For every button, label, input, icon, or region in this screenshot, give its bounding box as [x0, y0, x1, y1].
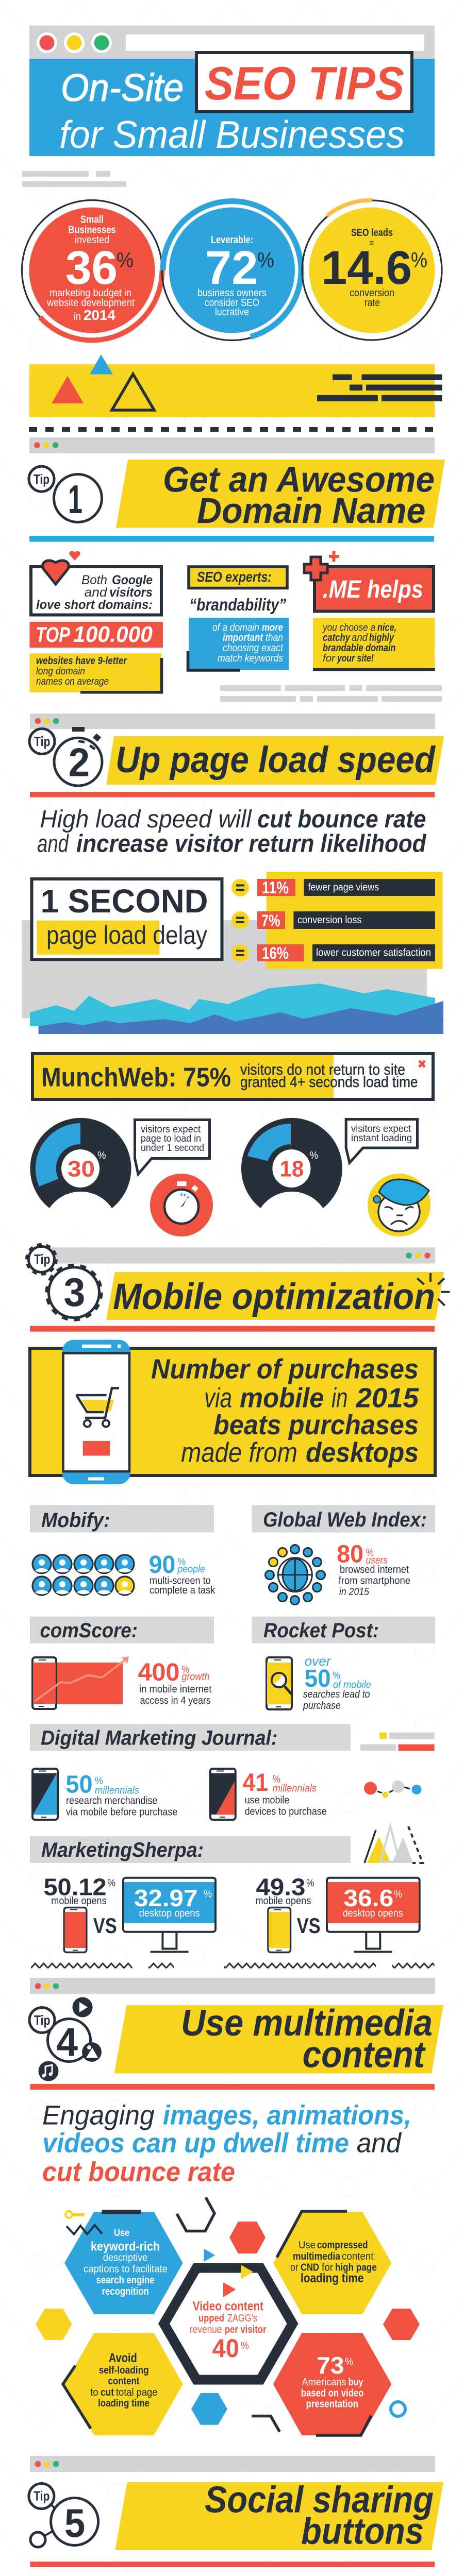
- panel: global web index: [252, 1505, 435, 1604]
- stat: 7% conversion loss: 7%: [261, 911, 280, 930]
- panel: love short domains: Both: [81, 573, 107, 587]
- stat circle: 14.6%: SEO leads: [351, 227, 393, 239]
- stat: 49.3% vs 36.6%: %: [394, 1889, 402, 1900]
- panel: mobile purchases 2015: in: [332, 1383, 347, 1414]
- hexagon: compressed multimedia: compressed: [317, 2240, 368, 2251]
- panel: global web index: from smartphone: [339, 1575, 410, 1586]
- panel: global web index: %: [366, 1547, 374, 1558]
- hexagon: video content 40%: revenue: [190, 2324, 222, 2335]
- panel: .ME helps: highly: [369, 632, 394, 643]
- panel: mobify: [30, 1505, 216, 1596]
- panel: seo experts brandability: than: [266, 632, 283, 643]
- panel: mobile purchases 2015: [30, 1340, 435, 1484]
- hexagon: video content 40%: Video content: [193, 2299, 264, 2313]
- icon: tip 1 badge: 1: [68, 477, 82, 522]
- tip 2 header: [29, 714, 444, 798]
- panel: one second delay: page load delay: [46, 921, 207, 950]
- panel: mobify: complete a task: [150, 1585, 216, 1596]
- hexagon: keyword-rich captions: recognition: [102, 2286, 149, 2297]
- stat circle: 36%: Small: [80, 214, 104, 226]
- icon: tip 2 stopwatch badge: Tip: [34, 734, 51, 749]
- stat circle: 72%: business owners: [197, 287, 267, 299]
- area chart: [30, 984, 443, 1034]
- panel: mobify: Mobify:: [41, 1509, 110, 1532]
- panel: digital marketing journal: 41: [243, 1769, 268, 1797]
- panel: .ME helps: nice,: [377, 622, 396, 634]
- panel: rocket post: [252, 1617, 435, 1711]
- chart: phone growth line: [32, 1656, 129, 1709]
- icon: tip 4 media badge: 4: [56, 2020, 78, 2065]
- panel: mobile purchases 2015: beats purchases: [213, 1410, 419, 1440]
- stat: 49.3% vs 36.6%: VS: [297, 1913, 321, 1938]
- stat circle: 14.6%: 14.6: [321, 242, 412, 294]
- hexagon diagram: [36, 2197, 420, 2435]
- hexagon: video content 40%: per visitor: [225, 2324, 267, 2335]
- panel: rocket post: purchase: [303, 1700, 341, 1711]
- panel: seo experts brandability: [188, 567, 289, 670]
- stat: 11% fewer page views: fewer page views: [308, 882, 379, 893]
- panel: comscore: access in 4 years: [140, 1695, 211, 1706]
- stat circle: 72%: %: [257, 248, 274, 272]
- stat: 7% conversion loss: conversion loss: [297, 914, 361, 926]
- panel: mobile purchases 2015: via: [204, 1383, 232, 1414]
- stat circle: 36%: 36: [65, 242, 118, 294]
- hexagon: video content 40%: 40: [212, 2334, 239, 2363]
- yellow band with triangles: [29, 354, 442, 417]
- icon: tip 5 share badge: [29, 2483, 98, 2547]
- stat: 11% fewer page views: 11%: [262, 878, 289, 897]
- heading: use multimedia content: content: [303, 2035, 426, 2076]
- icon: phone red triangle: [210, 1769, 236, 1820]
- panel: global web index: Global Web Index:: [263, 1509, 427, 1531]
- panel: rocket post: searches lead to: [303, 1689, 370, 1700]
- heading: up page load speed: Up page load speed: [115, 740, 436, 781]
- stat: 50.12% vs 32.97%: VS: [93, 1913, 117, 1938]
- gauge: 18%: %: [310, 1150, 318, 1161]
- panel: .ME helps: for: [323, 653, 336, 664]
- panel: one second delay: 1 SECOND: [41, 883, 208, 920]
- hexagon: 73% americans: buy: [349, 2377, 363, 2388]
- icon: phone with magnifier: [267, 1657, 292, 1709]
- panel: global web index: browsed internet: [340, 1564, 409, 1575]
- icon: frowning face: [368, 1174, 430, 1236]
- panel: marketingsherpa: [30, 1826, 423, 1953]
- gauge: 18%: [241, 1118, 342, 1208]
- subheading: images animations videos: cut bounce rate: [42, 2157, 235, 2188]
- panel: comscore: in mobile internet: [139, 1684, 212, 1695]
- stat circle: 36%: %: [117, 248, 134, 272]
- icon: phone blue triangle: [32, 1769, 58, 1820]
- stat circle: 72%: Leverable:: [211, 234, 253, 246]
- stat circle: 14.6%: rate: [364, 297, 380, 309]
- panel: rocket post: over: [305, 1653, 332, 1669]
- panel: love short domains: love short domains:: [36, 598, 153, 612]
- panel: comscore: comScore:: [40, 1619, 138, 1642]
- hexagon: 73% americans: based on video: [301, 2387, 363, 2399]
- stat circle: 72%: 72: [205, 242, 258, 294]
- panel: digital marketing journal: Digital Marketing Journal:: [41, 1727, 277, 1750]
- panel: global web index: users: [366, 1555, 388, 1566]
- stat: 11% fewer page views: [231, 878, 435, 897]
- icon: phone with cart: [62, 1340, 130, 1484]
- callout: munchweb 75%: granted 4+ seconds load time: [240, 1074, 418, 1091]
- panel: mobile purchases 2015: 2015: [355, 1383, 419, 1414]
- hexagon: avoid self-loading: total page: [116, 2387, 157, 2398]
- speech bubble: instant loading: [346, 1119, 418, 1163]
- hexagon: 73% americans: %: [345, 2357, 353, 2368]
- panel: global web index: in 2015: [339, 1586, 370, 1598]
- hexagon: compressed multimedia: high page: [335, 2262, 377, 2273]
- header: browser window title: [29, 26, 435, 156]
- panel: digital marketing journal: use mobile: [245, 1795, 289, 1806]
- stat: 50.12% vs 32.97%: %: [107, 1878, 115, 1889]
- heading: social sharing buttons: buttons: [301, 2511, 424, 2552]
- icon: tip 4 media badge: Tip: [34, 2012, 51, 2028]
- panel: digital marketing journal: via mobile before purchase: [66, 1806, 177, 1818]
- title: SEO TIPS: [205, 58, 404, 110]
- panel: mobify: %: [177, 1556, 186, 1568]
- hexagon: keyword-rich captions: captions to facilitate: [84, 2264, 168, 2275]
- hexagon: compressed multimedia: for: [322, 2262, 333, 2273]
- stat circle: 36%: Businesses: [68, 225, 115, 236]
- icon: tip 4 media badge: [29, 1997, 102, 2081]
- panel: seo experts brandability: of a domain: [212, 622, 259, 634]
- stat: 49.3% vs 36.6%: mobile opens: [255, 1895, 311, 1907]
- callout: munchweb 75%: [32, 1054, 433, 1099]
- speech bubble: under 1 second: under 1 second: [141, 1143, 204, 1154]
- stat circle: 36%: website development: [46, 297, 135, 309]
- stat circle: 14.6%: %: [411, 248, 427, 272]
- title: [59, 58, 405, 156]
- hexagon: 73% americans: presentation: [306, 2399, 358, 2410]
- hexagon: video content 40%: [164, 2265, 293, 2380]
- gauge: 18%: 18: [279, 1157, 304, 1182]
- heading: social sharing buttons: Social sharing: [205, 2479, 434, 2520]
- icon: triangles: [364, 1826, 423, 1863]
- stat: 49.3% vs 36.6%: 36.6: [343, 1885, 393, 1911]
- panel: comscore: %: [181, 1664, 189, 1675]
- stat: 50.12% vs 32.97%: [43, 1873, 216, 1953]
- hexagon: 73% americans: [273, 2333, 405, 2435]
- panel: love short domains: and: [85, 585, 108, 600]
- panel: love short domains: Google: [112, 573, 153, 587]
- heading: mobile optimization: Mobile optimization: [113, 1277, 435, 1317]
- panel: love short domains: 100.000: [73, 622, 153, 647]
- panel: seo experts brandability: SEO experts:: [197, 569, 272, 585]
- gauge: 30%: %: [97, 1150, 106, 1161]
- panel: rocket post: Rocket Post:: [263, 1619, 379, 1642]
- stat circle: 14.6%: =: [369, 239, 374, 248]
- stat: 50.12% vs 32.97%: desktop opens: [139, 1908, 200, 1919]
- title: On-Site: [61, 66, 184, 109]
- heading: use multimedia content: Use multimedia: [181, 2003, 433, 2044]
- stat: 16% lower customer satisfaction: [231, 944, 435, 962]
- hexagon: compressed multimedia: [273, 2211, 391, 2314]
- stat circle: 36%: marketing budget in: [49, 287, 131, 299]
- panel: .ME helps: and: [352, 632, 368, 643]
- hexagon: compressed multimedia: loading time: [301, 2271, 364, 2285]
- stat: 50.12% vs 32.97%: 32.97: [134, 1885, 197, 1911]
- icon: plus signs: [304, 551, 339, 580]
- panel: comscore: 400: [138, 1659, 179, 1686]
- subheading: images animations videos: Engaging: [42, 2100, 155, 2131]
- panel: .ME helps: you choose a: [322, 622, 375, 634]
- hexagon: 73% americans: Americans: [302, 2377, 346, 2388]
- panel: mobile purchases 2015: Number of purchases: [151, 1354, 419, 1385]
- tip 5 header: [29, 2456, 443, 2567]
- icon: connected dots: [364, 1781, 422, 1798]
- title: for Small Businesses: [59, 113, 405, 156]
- panel: .ME helps: catchy: [323, 632, 351, 643]
- tip 4 header: [29, 1978, 443, 2090]
- icon: tip 1 badge: [29, 466, 102, 522]
- panel: mobify: people: [177, 1564, 205, 1575]
- hexagon: avoid self-loading: self-loading: [99, 2365, 149, 2376]
- hexagon: video content 40%: %: [241, 2341, 249, 2352]
- panel: marketingsherpa: MarketingSherpa:: [41, 1839, 204, 1861]
- panel: love short domains: TOP: [36, 622, 71, 647]
- panel: mobile purchases 2015: made from: [181, 1437, 297, 1468]
- panel: mobile purchases 2015: mobile: [240, 1383, 324, 1414]
- icon: tip 1 badge: Tip: [34, 471, 49, 487]
- gauge: 30%: 30: [68, 1157, 95, 1182]
- hexagon: compressed multimedia: Use: [299, 2240, 316, 2251]
- panel: rocket post: of mobile: [333, 1680, 371, 1691]
- subheading: page speed benefit: increase visitor return likelihood: [76, 831, 427, 858]
- panel: digital marketing journal: [30, 1724, 435, 1820]
- tip 3 header: [27, 1245, 450, 1332]
- subheading: images animations videos: [42, 2100, 411, 2188]
- heading: get an awesome domain name: [116, 460, 445, 531]
- icon: tip 5 share badge: 5: [64, 2500, 85, 2546]
- panel: .ME helps: brandable domain: [323, 642, 396, 654]
- hexagon: avoid self-loading: cut: [101, 2387, 114, 2398]
- panel: comscore: growth: [181, 1671, 209, 1683]
- hexagon: avoid self-loading: loading time: [98, 2398, 150, 2409]
- stat: 7% conversion loss: [231, 911, 435, 930]
- stat circle: 72%: consider SEO: [205, 297, 259, 309]
- panel: digital marketing journal: research merchandise: [66, 1795, 157, 1806]
- panel: digital marketing journal: %: [95, 1775, 103, 1787]
- hexagon: keyword-rich captions: keyword-rich: [91, 2240, 160, 2254]
- panel: seo experts brandability: more: [262, 622, 283, 634]
- speech bubble: under 1 second: visitors expect: [141, 1124, 201, 1135]
- stat circle: 72%: lucrative: [215, 307, 249, 318]
- panel: .ME helps: [304, 551, 435, 671]
- panel: rocket post: 50: [305, 1665, 331, 1692]
- hexagon: keyword-rich captions: Use: [114, 2228, 129, 2239]
- speech bubble: instant loading: instant loading: [351, 1133, 412, 1144]
- panel: seo experts brandability: match keywords: [218, 653, 283, 664]
- hexagon: avoid self-loading: Avoid: [109, 2351, 137, 2365]
- stat circle: 72%: [162, 200, 302, 340]
- stat circle: 14.6%: [302, 200, 442, 340]
- panel: seo experts brandability: “brandability”: [189, 595, 286, 614]
- panel: digital marketing journal: millennials: [95, 1785, 139, 1797]
- icon: tip 2 stopwatch badge: [29, 727, 102, 786]
- panel: global web index: 80: [337, 1541, 363, 1568]
- speech bubble: under 1 second: [135, 1120, 209, 1174]
- stat: 49.3% vs 36.6%: 49.3: [256, 1873, 305, 1900]
- hexagon: compressed multimedia: multimedia: [293, 2251, 341, 2262]
- stat: 49.3% vs 36.6%: [255, 1873, 420, 1953]
- panel: .ME helps: .ME helps: [323, 576, 423, 603]
- hexagon: video content 40%: ZAGG’s: [227, 2313, 257, 2324]
- panel: digital marketing journal: devices to purchase: [245, 1806, 327, 1817]
- stat circle: 36%: [22, 200, 162, 340]
- panel: digital marketing journal: %: [273, 1774, 280, 1785]
- hexagon: compressed multimedia: or: [290, 2262, 299, 2273]
- heading: social sharing buttons: [115, 2479, 443, 2552]
- hexagon: keyword-rich captions: [64, 2210, 183, 2314]
- stat: 50.12% vs 32.97%: 50.12: [43, 1873, 107, 1900]
- panel: comscore: [30, 1617, 214, 1709]
- panel: love short domains: long domain: [36, 666, 85, 677]
- panel: one second delay: [22, 872, 443, 1034]
- subheading: page speed benefit: [37, 806, 427, 858]
- panel: love short domains: visitors: [109, 585, 153, 600]
- subheading: page speed benefit: High load speed will: [40, 806, 252, 833]
- heading: get an awesome domain name: Domain Name: [197, 490, 426, 531]
- stat circle: 14.6%: conversion: [350, 287, 394, 299]
- icon: red cross: [419, 1061, 425, 1067]
- hexagon: compressed multimedia: CND: [301, 2262, 319, 2273]
- stat circle: 36%: invested: [75, 234, 109, 246]
- icon: globe with people: [265, 1545, 325, 1604]
- stat: 49.3% vs 36.6%: desktop opens: [343, 1908, 403, 1919]
- subheading: images animations videos: images, animations,: [163, 2100, 411, 2131]
- icon: tip 3 gears: [27, 1245, 101, 1319]
- icon: hearts: [43, 551, 80, 584]
- hexagon: avoid self-loading: to: [90, 2387, 98, 2398]
- subheading: images animations videos: videos can up dwell time: [42, 2128, 349, 2159]
- callout: munchweb 75%: visitors do not return to site: [240, 1061, 405, 1078]
- icon: tip 3 gears: Tip: [34, 1251, 51, 1267]
- hexagon: keyword-rich captions: search engine: [96, 2275, 155, 2286]
- panel: love short domains: [29, 551, 163, 692]
- stat: 50.12% vs 32.97%: mobile opens: [51, 1895, 107, 1907]
- tip 1 header: [29, 437, 445, 542]
- hexagon: video content 40%: upped: [198, 2313, 224, 2324]
- panel: mobify: 90: [149, 1551, 175, 1579]
- panel: love short domains: names on average: [36, 676, 109, 687]
- panel: mobify: multi-screen to: [150, 1575, 211, 1586]
- subheading: page speed benefit: cut bounce rate: [257, 806, 426, 833]
- hexagon: 73% americans: 73: [317, 2352, 344, 2379]
- heading: get an awesome domain name: Get an Awesome: [163, 460, 435, 500]
- hexagon: compressed multimedia: content: [342, 2251, 374, 2262]
- icon: tip 3 gears: 3: [63, 1269, 85, 1315]
- speech bubble: instant loading: visitors expect: [351, 1124, 411, 1134]
- panel: love short domains: websites have 9-letter: [36, 655, 127, 667]
- subheading: images animations videos: and: [357, 2128, 402, 2159]
- panel: seo experts brandability: choosing exact: [223, 642, 284, 654]
- hexagon: keyword-rich captions: descriptive: [103, 2252, 147, 2264]
- panel: mobile purchases 2015: desktops: [306, 1437, 419, 1468]
- icon: tip 5 share badge: Tip: [34, 2488, 49, 2504]
- panel: digital marketing journal: millennials: [273, 1783, 317, 1794]
- panel: digital marketing journal: 50: [65, 1771, 93, 1799]
- icon: stopwatch: [150, 1174, 213, 1236]
- subheading: page speed benefit: and: [37, 831, 69, 858]
- panel: seo experts brandability: important: [223, 632, 263, 643]
- hexagon: avoid self-loading: content: [108, 2376, 140, 2387]
- hexagon: avoid self-loading: [63, 2333, 183, 2435]
- stat: 49.3% vs 36.6%: %: [306, 1878, 314, 1889]
- icon: tip 2 stopwatch badge: 2: [69, 740, 90, 785]
- stat: 16% lower customer satisfaction: lower customer satisfaction: [316, 947, 431, 959]
- panel: rocket post: %: [333, 1670, 340, 1682]
- gauge: 30%: [30, 1118, 131, 1208]
- icon: people grid: [32, 1555, 134, 1595]
- speech bubble: under 1 second: page to load in: [141, 1133, 201, 1144]
- heading: use multimedia content: [114, 2003, 443, 2076]
- stat: 16% lower customer satisfaction: 16%: [262, 944, 289, 962]
- stat circle: 36%: 2014: [84, 307, 115, 323]
- stat circle: 36%: in: [74, 311, 81, 323]
- panel: .ME helps: your site!: [337, 653, 374, 664]
- stat: 50.12% vs 32.97%: %: [204, 1889, 212, 1900]
- callout: munchweb 75%: MunchWeb: 75%: [41, 1063, 231, 1093]
